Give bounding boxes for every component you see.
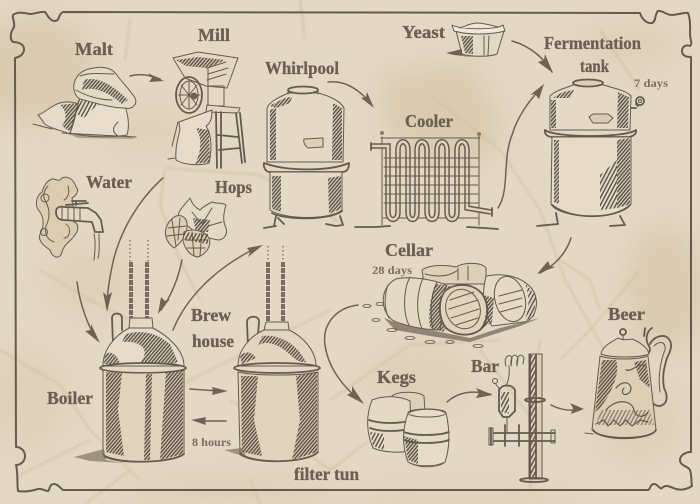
icon: bar tap tower [489,354,555,482]
icon: beer stein [585,328,671,438]
icon: filter tun kettle [224,246,320,461]
heading: Kegs: Kegs [377,367,416,387]
icon: mill [168,52,245,168]
arrow: whirlpool to cooler [328,82,374,108]
arrow: hops to boiler [158,260,182,314]
icon: hops [165,198,227,257]
icon: yeast bowl [446,23,505,57]
arrow: filter tun to boiler [191,417,226,425]
arrow: yeast to fermentation tank [512,41,553,73]
heading: filter tun: filter tun [294,464,359,484]
heading: Beer: Beer [608,304,645,324]
arrow: fermentation tank to cellar [537,238,571,274]
icon: cellar barrels [363,263,540,348]
caption: 8 hours: 8 hours [192,435,231,449]
icon: boiler kettle [74,240,186,463]
heading: house: house [192,331,234,351]
heading: tank: tank [580,56,609,76]
icon: malt sacks [33,67,136,139]
caption: 28 days: 28 days [372,263,412,277]
icon: wall tap for water [36,177,103,260]
heading: Boiler: Boiler [47,388,93,408]
arrow: malt to mill [130,73,164,82]
heading: Whirlpool: Whirlpool [265,58,339,78]
caption: 7 days: 7 days [634,76,668,90]
heading: Mill: Mill [198,25,230,45]
heading: Cooler: Cooler [405,111,453,131]
arrow: cellar to kegs [325,305,364,404]
arrow: brew house to whirlpool [173,245,263,330]
icon: fermentation tank [537,80,644,226]
icon: cooler [355,131,498,229]
heading: Bar: Bar [471,356,499,376]
arrow: malt to boiler [77,282,100,343]
arrow: cooler to fermentation tank [498,84,544,208]
heading: Malt: Malt [75,39,113,59]
heading: Fermentation: Fermentation [544,33,641,53]
arrow: kegs to bar [447,388,493,402]
heading: Cellar: Cellar [385,240,433,260]
heading: Hops: Hops [215,177,252,197]
heading: Yeast: Yeast [402,22,445,42]
icon: kegs [368,392,449,467]
arrow: water to boiler [103,178,163,312]
heading: Water: Water [86,172,132,192]
heading: Brew: Brew [191,305,231,325]
icon: whirlpool tank [264,86,349,228]
arrow: boiler to filter tun [190,387,228,395]
arrow: bar to beer [551,403,584,414]
